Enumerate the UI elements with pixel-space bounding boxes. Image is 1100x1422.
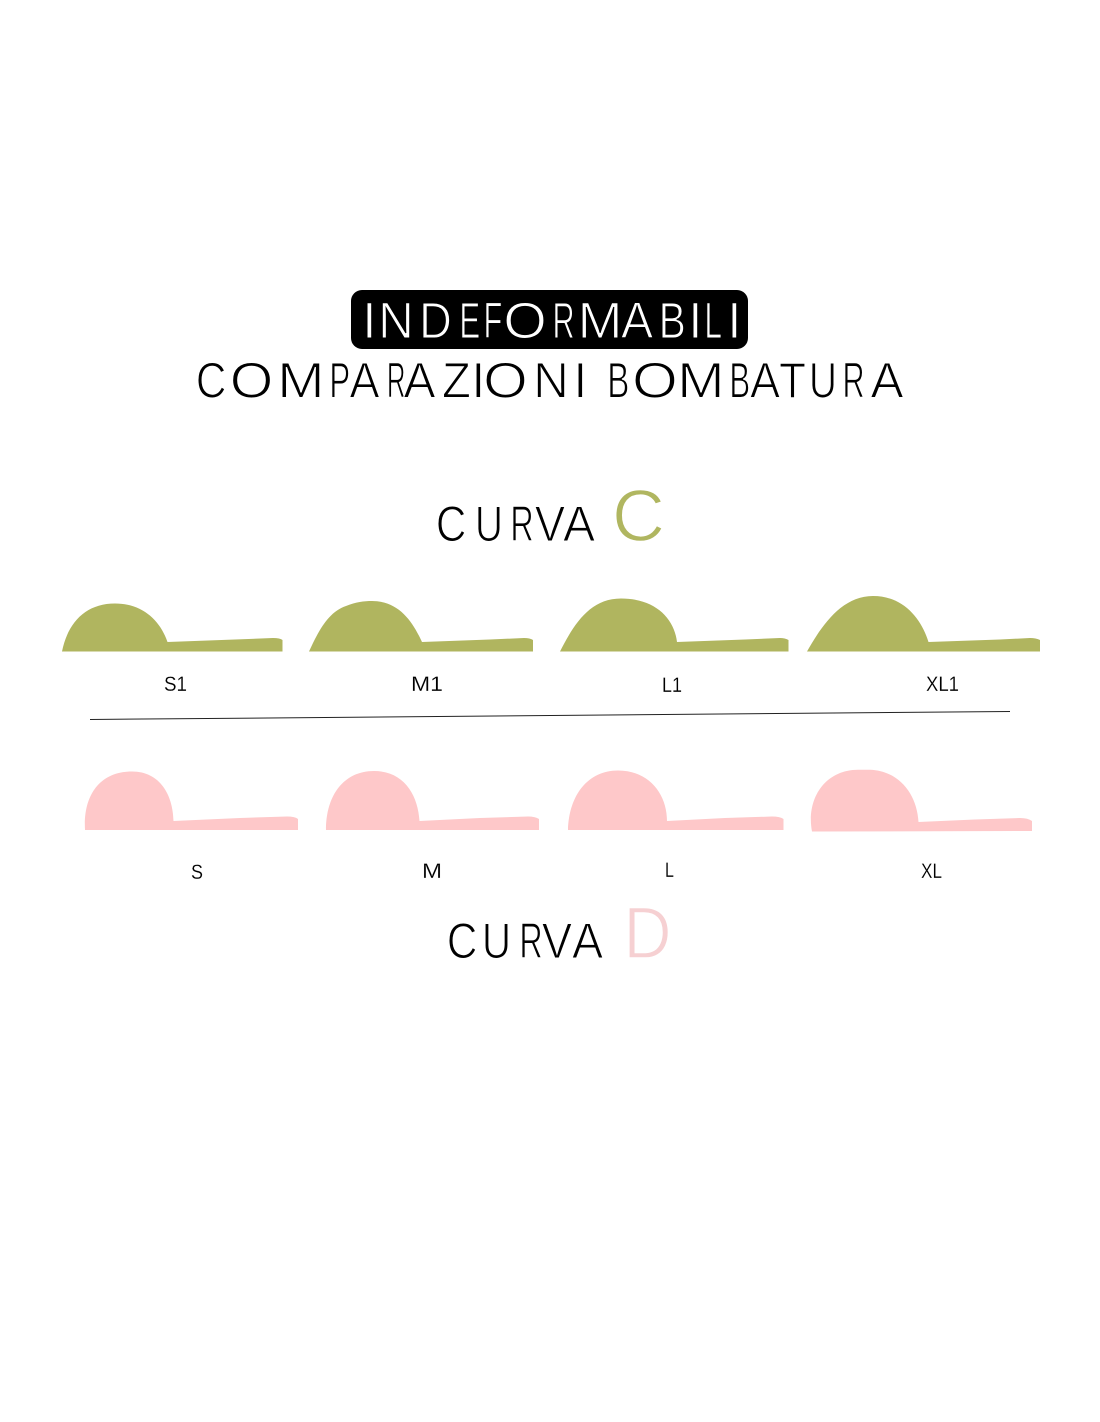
subtitle: T	[779, 352, 806, 408]
label M1: M1	[411, 673, 443, 696]
profile M	[326, 771, 539, 830]
subtitle: I	[573, 352, 587, 408]
subtitle: A	[870, 352, 904, 408]
label L: L	[665, 859, 674, 882]
subtitle: M	[677, 352, 725, 408]
label M: M	[422, 860, 442, 883]
label S1: S1	[164, 673, 187, 696]
divider line	[90, 712, 1010, 720]
title badge: INDEFORMABILI: A	[621, 292, 653, 349]
heading: Curva C: R	[510, 496, 534, 552]
subtitle: M	[277, 352, 325, 408]
subtitle: B	[607, 352, 629, 408]
title badge: INDEFORMABILI: R	[552, 292, 575, 349]
subtitle: U	[809, 352, 837, 408]
subtitle: A	[404, 352, 436, 408]
title badge: INDEFORMABILI: B	[659, 292, 686, 349]
profile L	[568, 770, 784, 830]
subtitle: P	[329, 352, 350, 408]
profile XL1	[807, 596, 1040, 652]
title badge: INDEFORMABILI: I	[362, 292, 376, 349]
title block	[196, 290, 904, 408]
heading: Curva C: V	[535, 496, 566, 552]
profile M1	[309, 601, 533, 652]
subtitle: N	[533, 352, 569, 408]
heading: Curva C: U	[475, 496, 503, 552]
title badge: INDEFORMABILI: O	[503, 292, 547, 349]
title badge: INDEFORMABILI: L	[704, 292, 722, 349]
title badge: INDEFORMABILI: N	[378, 292, 414, 349]
profile S1	[62, 604, 282, 652]
title badge: INDEFORMABILI: D	[419, 292, 452, 349]
label XL: XL	[921, 860, 942, 883]
subtitle: A	[350, 352, 380, 408]
subtitle: B	[729, 352, 750, 408]
title badge: INDEFORMABILI: M	[578, 292, 622, 349]
label S: S	[191, 861, 203, 884]
profile S	[85, 772, 298, 830]
heading: Curva C	[436, 476, 665, 557]
subtitle: O	[230, 352, 273, 408]
title badge: INDEFORMABILI: F	[484, 292, 502, 349]
label XL1: XL1	[926, 673, 959, 696]
label L1: L1	[662, 674, 682, 697]
title badge: INDEFORMABILI: I	[727, 292, 742, 349]
panel: curve D profiles	[85, 770, 1032, 884]
heading: Curva D: A	[572, 913, 604, 969]
heading: Curva D	[447, 893, 672, 974]
subtitle: O	[483, 352, 528, 408]
subtitle: I	[471, 352, 485, 408]
heading: Curva D: V	[542, 913, 573, 969]
profile XL	[811, 770, 1032, 832]
heading: Curva D: U	[482, 913, 511, 969]
title badge: INDEFORMABILI: I	[688, 292, 702, 349]
subtitle: O	[632, 352, 678, 408]
panel: curve C profiles	[62, 596, 1040, 697]
subtitle: R	[387, 352, 406, 408]
title badge: INDEFORMABILI: E	[459, 292, 480, 349]
title badge: INDEFORMABILI	[351, 290, 748, 349]
subtitle: R	[842, 352, 865, 408]
subtitle: A	[750, 352, 781, 408]
heading: Curva C: C	[436, 496, 466, 552]
subtitle: Z	[442, 352, 471, 408]
profile L1	[560, 598, 788, 652]
heading: Curva D: C	[447, 913, 477, 969]
heading: Curva C: C	[612, 476, 665, 557]
subtitle: C	[196, 352, 226, 408]
heading: Curva D: D	[624, 893, 672, 974]
heading: Curva D: R	[519, 913, 543, 969]
heading: Curva C: A	[563, 496, 596, 552]
